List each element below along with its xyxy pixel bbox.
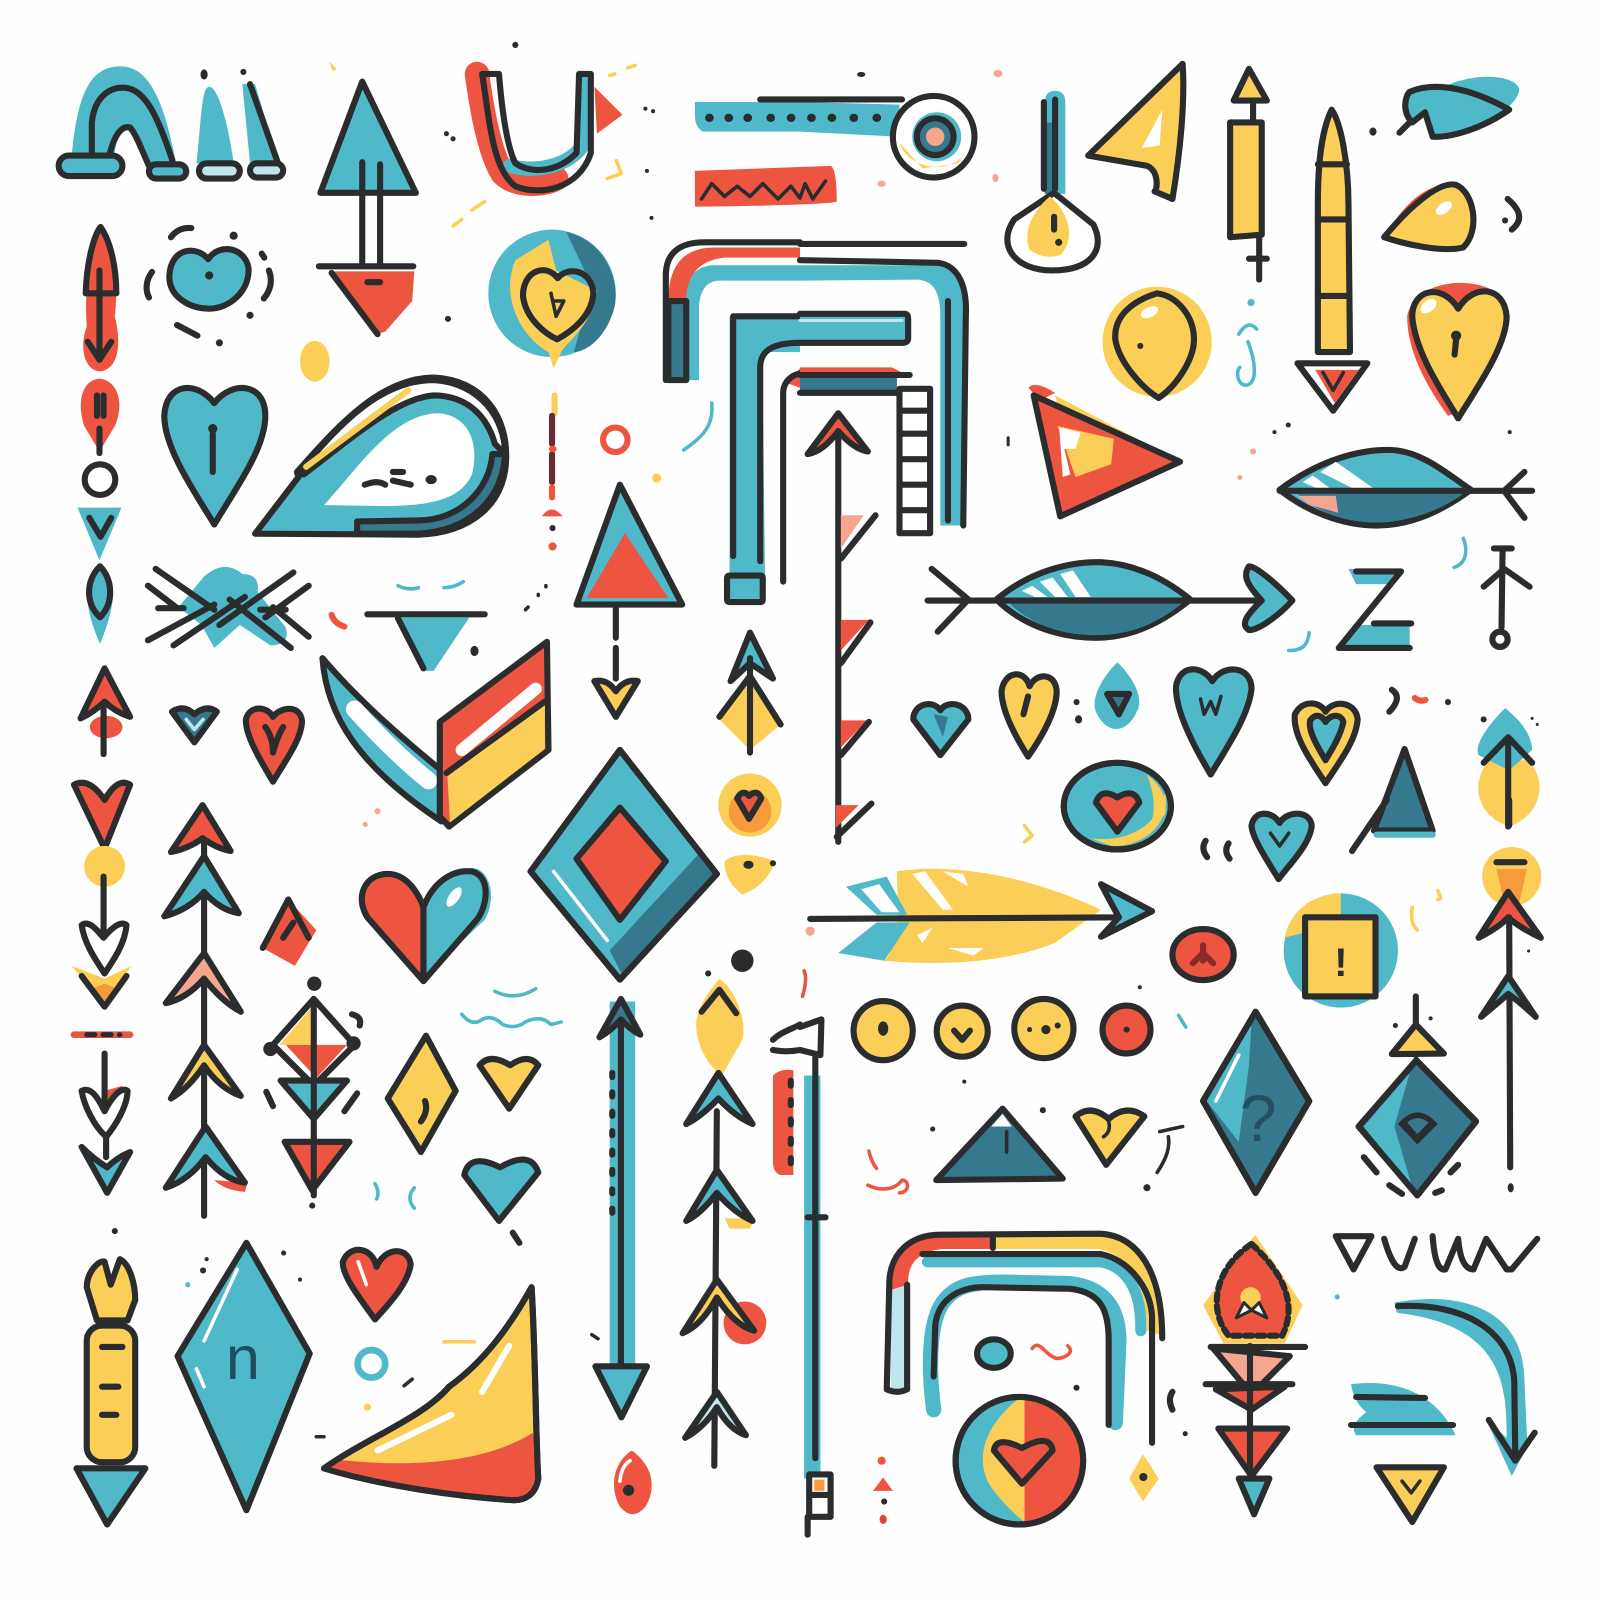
icon: red zigzag bar [695,166,837,207]
icon: red peace circle [1172,929,1234,980]
icon: downward arrow on yellow dot [82,846,127,973]
icon: nested frame two left [727,316,800,602]
icon: small yellow diamond [1129,1454,1159,1502]
icon: big teal heart W [1176,669,1252,774]
exclamation mark: ! [1334,941,1347,985]
icon: long teal arrow [595,999,647,1417]
icon: teal oval and squiggle [977,1339,1070,1368]
small marks middle [803,826,1186,1193]
icon: nested frame one right [800,244,966,526]
small marks bottom-left [185,808,598,1437]
dashed marker column [542,395,563,551]
top-left quadrant [59,42,800,837]
icon: teal-yellow column top [1478,708,1540,827]
icon: dark teal question diamond [1203,1012,1309,1193]
icon: flame ornament [1203,1235,1305,1514]
icon: small red diamond [263,899,316,966]
icon: crossed fletching [148,567,309,648]
icon: orange circle with heart [718,773,782,837]
icon: red bar [773,1070,793,1175]
icon: dark teal triangle [936,1109,1063,1180]
icon: teal drop with triangle [1073,662,1139,729]
icon: big teal diamond [178,1243,310,1510]
icon: small teal heart [913,704,968,755]
icon: large diamond [531,750,717,980]
icon: red seed drop [614,1451,652,1514]
icon: spine with five arrows [164,805,247,1216]
icon: nested frame two right [800,314,908,343]
icon: curved teal arrow [1394,1299,1535,1476]
icon: arrow with white heart [82,1054,130,1193]
icon: red play triangle [1029,385,1180,516]
icon: yellow triangle [1088,64,1183,199]
icon: yellow heart [1002,674,1057,757]
icon: red heart [343,1250,411,1319]
icon: feather arrow two [928,562,1292,638]
question mark: ? [1240,1082,1277,1156]
icon: small yellow heart [480,1059,538,1109]
icon: arch inner [930,1282,1119,1425]
icon: yellow sail triangle [324,1287,538,1500]
icon: big chevron [322,642,548,827]
top-right quadrant [695,64,1540,842]
black dot [731,949,754,972]
icon: teal heart [464,1160,538,1243]
icon: right column yellow blob and arrows [1479,800,1541,1192]
teal hook squiggle [1238,299,1257,385]
icon: triangle with red inset [577,485,682,717]
icon: circle with yellow heart [488,230,616,368]
icon: nested yellow heart [1295,703,1358,783]
icon: red drop [81,379,119,453]
icon: square alert on circle [1284,891,1440,1008]
icon: red heart [246,709,302,782]
icon: oval with red heart [1064,763,1171,849]
icon: small red arrow [81,668,130,754]
icon: key with yellow bulb [1007,91,1098,270]
icon: spine with four arrows [683,1073,766,1466]
icon: arch outer [887,1234,1163,1443]
icon: yellow circle gem [1103,287,1212,398]
icon: teal pillars [196,69,283,179]
icon: teal arch [59,66,186,179]
red dotted marker [873,1385,1188,1524]
icon: teal leaf [1369,77,1519,137]
letter n: n [226,1324,260,1392]
icon: blue heart with marks [147,228,271,346]
icon: yellow blob [724,855,776,894]
icon: row of circles [854,999,1151,1060]
teal squiggle [684,403,712,450]
icon: stick arrow figure [1484,548,1530,647]
icon: ladder frame [800,367,930,533]
icon: yellow dot [300,341,330,382]
icon: teal triangle [78,508,121,560]
icon: yellow heart triangle [1076,1111,1144,1165]
icon: small yellow triangle [1377,1467,1444,1522]
icon: letter Z shape [1339,569,1411,649]
icon: tri-colour heart circle [956,1397,1085,1524]
icon: inverted small triangle [367,582,485,671]
zigzag line [1335,1236,1537,1299]
icon: ring [85,464,115,495]
icon: long flag arrow [808,413,876,842]
icon: dark teal triangle [1352,749,1433,851]
icon: teal equals bars [1351,1383,1456,1435]
icon: column arrow on red leaf [83,227,118,371]
bottom-right quadrant [800,749,1541,1535]
icon: yellow heart keyhole [1407,283,1507,418]
icon: pole flag left part [773,1024,800,1051]
icon: feather one [1280,450,1532,526]
bottom-left quadrant [71,750,800,1524]
icon: big teardrop [255,378,506,535]
scattered marks right [857,70,1512,712]
icon: yellow leaf top [696,970,743,1076]
teal wave [375,989,561,1208]
icon: red letter U arrow [477,74,622,190]
scattered dots top-left [329,42,661,627]
icon: yellow pencil one [1230,69,1267,280]
icon: nested frame three left [783,368,800,582]
icon: triangle arrow with red base [319,82,416,334]
icon: ornament stack [263,977,361,1209]
icon: small heart teal [1203,814,1312,879]
icon: teal drop [87,565,113,644]
icon: red chevron heart [74,783,130,848]
icon: red ring [603,428,628,452]
icon: teal-yellow stacked arrow [717,633,781,753]
icon: ornament diamond [1359,996,1476,1195]
icon: yellow pencil two [1297,110,1367,411]
icon: yellow wedge [1384,184,1519,249]
icon: dotted bar with target [695,96,974,178]
icon: small teal heart [172,708,217,742]
icon: yellow chevron [71,966,132,1007]
icon: yellow feather arrow [806,869,1152,963]
icon: paintbrush [77,1228,145,1524]
icon: big teal heart [164,388,265,524]
icon: nested frame one left [666,242,800,380]
red dashed bar [74,1028,130,1041]
icon: split heart [362,868,491,981]
icon: long pole with flag [800,1019,831,1535]
icon: teal ring [358,1350,385,1378]
icon: yellow diamond [388,1036,456,1152]
